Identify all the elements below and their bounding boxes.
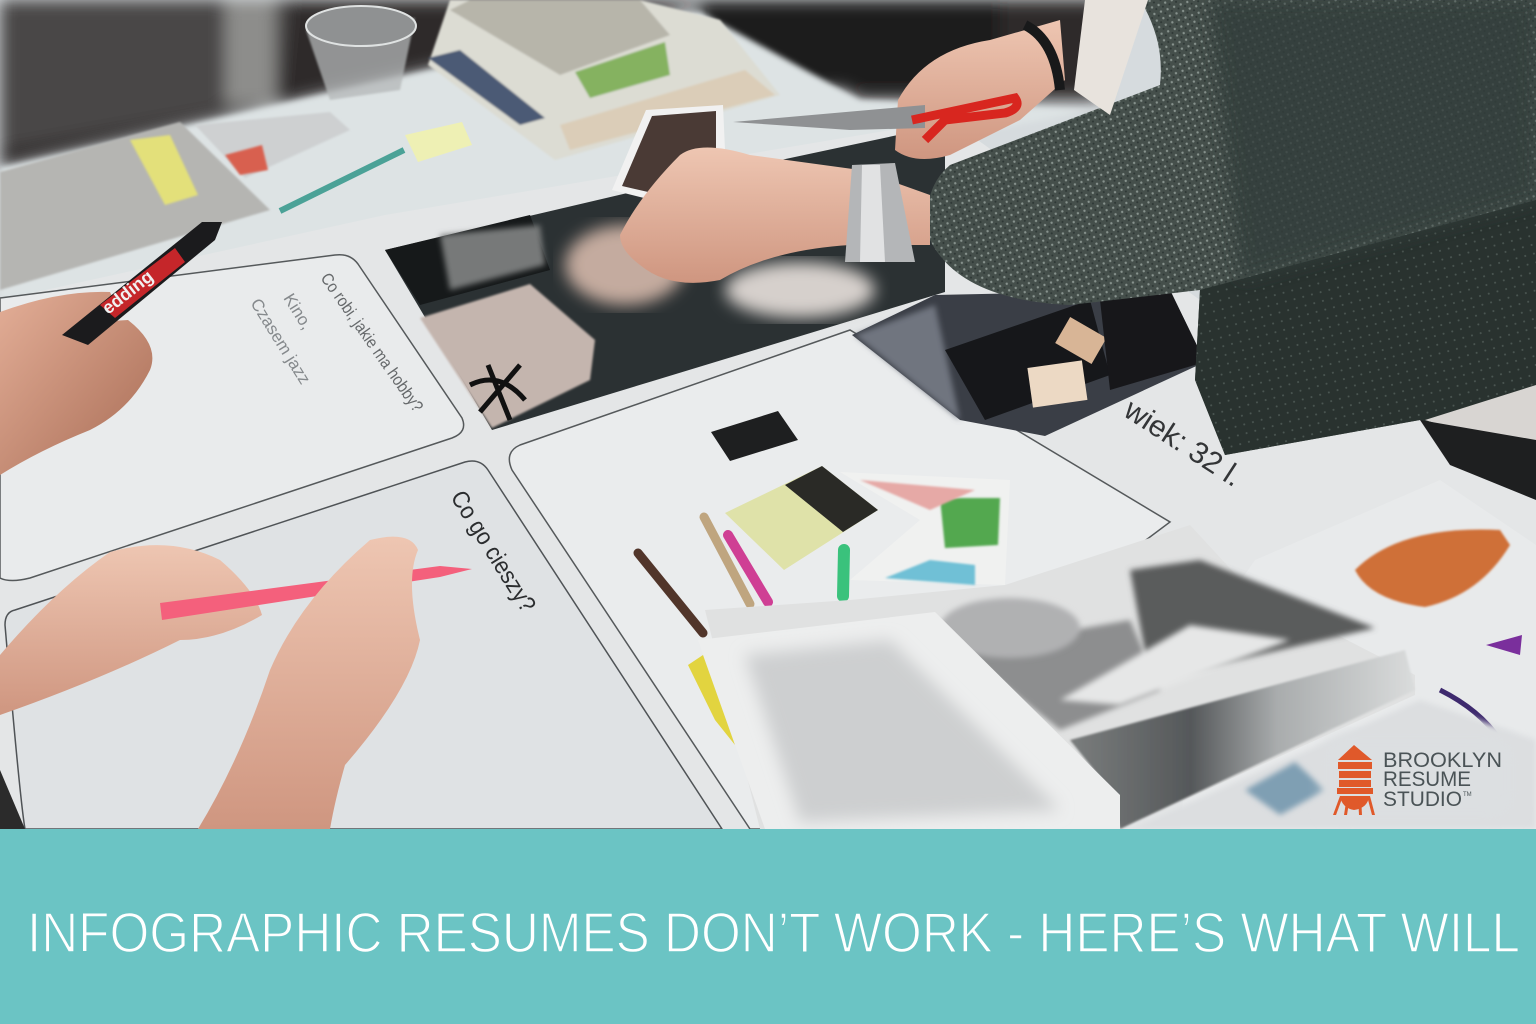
sticky-note pack: [725, 466, 878, 570]
card text: age: wiek: 32 l.: [1117, 393, 1248, 494]
plastic cup: [306, 6, 416, 100]
sticky note: [405, 122, 472, 162]
logo wordmark: STUDIO: [1383, 788, 1462, 811]
logo wordmark: RESUME: [1383, 768, 1471, 791]
banner background: [0, 829, 1536, 1024]
logo wordmark: TM: [1463, 792, 1472, 798]
small photo chip: [711, 411, 798, 461]
marker: [62, 222, 222, 345]
magazine spread: [688, 525, 1536, 829]
candle window photo: [852, 290, 1205, 436]
blurred patch behind logo: [1325, 735, 1515, 820]
orange shape on sheet: [1355, 530, 1510, 607]
patterned paper left: [0, 122, 270, 290]
table top highlight: [0, 12, 1100, 300]
sweater arm and torso: [928, 0, 1536, 480]
card top-left: [0, 255, 464, 580]
left hand with marker: [0, 222, 222, 475]
lanyard badge: [1074, 0, 1148, 115]
card text: what pleases him: Co go cieszy?: [445, 486, 541, 617]
logo wordmark: [1383, 749, 1502, 811]
icon: orange water tower: [1333, 745, 1375, 815]
green pen: [280, 150, 404, 211]
scissors handles: [912, 98, 1017, 140]
card bottom-left: [5, 461, 722, 829]
large black and white collage photo: [385, 125, 945, 430]
logo wordmark: BROOKLYN: [1383, 749, 1502, 772]
bracelet: [1025, 25, 1060, 90]
coloured pens: [638, 517, 844, 633]
title banner: [0, 829, 1536, 1024]
hand with scissors: [733, 20, 1065, 159]
pink pen: [160, 566, 472, 620]
dark table area under torso: [1420, 420, 1536, 500]
polaroid: [612, 105, 725, 212]
card text: handwriting: Czasem jazz: [247, 295, 314, 388]
card centre: [509, 330, 1170, 829]
left hand with marker: edding: [98, 266, 157, 318]
card text: hobby question: Co robi, jakie ma hobby?: [317, 269, 427, 415]
right hand with pink pen, lower left: [0, 537, 472, 829]
hand holding polaroid: [612, 105, 930, 283]
dark corner bottom left: [0, 770, 25, 829]
wristwatch: [845, 163, 915, 262]
white shirt corner: [1425, 385, 1536, 440]
stacked magazines: [428, 0, 780, 160]
card text: handwriting: Kino,: [280, 290, 316, 333]
white worksheet: [0, 120, 1536, 829]
torn colour scraps: [840, 472, 1010, 585]
scissors blades: [733, 105, 925, 130]
logo: Brooklyn Resume Studio: [1333, 745, 1502, 815]
dark room background: [0, 0, 1100, 168]
white background sheet right: [1180, 480, 1536, 829]
